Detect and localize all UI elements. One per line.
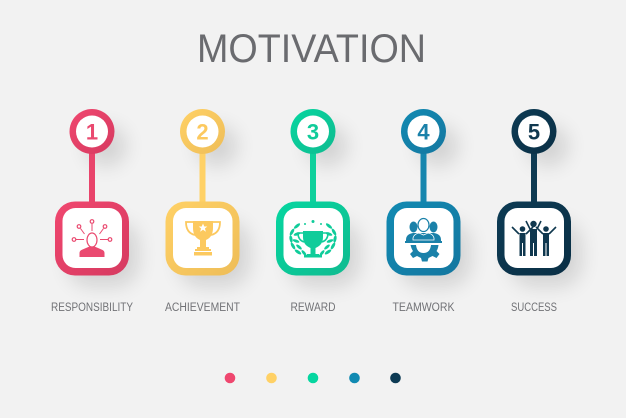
number 2: 2 — [196, 120, 209, 144]
label: achievement: ACHIEVEMENT — [165, 302, 240, 314]
icon: trophy — [186, 221, 220, 256]
number 1: 1 — [86, 120, 98, 144]
icon: person with connections — [72, 220, 112, 257]
label: success: SUCCESS — [511, 302, 557, 314]
step 4: teamwork — [386, 109, 470, 286]
step 3: reward — [276, 109, 359, 286]
number 3: 3 — [307, 120, 319, 144]
icon: three people cheering — [512, 221, 556, 256]
step 1: responsibility — [55, 109, 138, 286]
step 2: achievement — [166, 109, 249, 286]
number 4: 4 — [417, 120, 430, 144]
label: responsibility: RESPONSIBILITY — [51, 302, 133, 314]
number 5: 5 — [528, 120, 540, 144]
label: reward: REWARD — [290, 302, 336, 314]
title: MOTIVATION — [197, 27, 426, 71]
step 5: success — [497, 109, 581, 286]
icon: team over gear — [405, 218, 442, 262]
label: teamwork: TEAMWORK — [392, 302, 455, 314]
pagination dots — [225, 373, 401, 383]
icon: trophy with laurel — [289, 220, 337, 258]
